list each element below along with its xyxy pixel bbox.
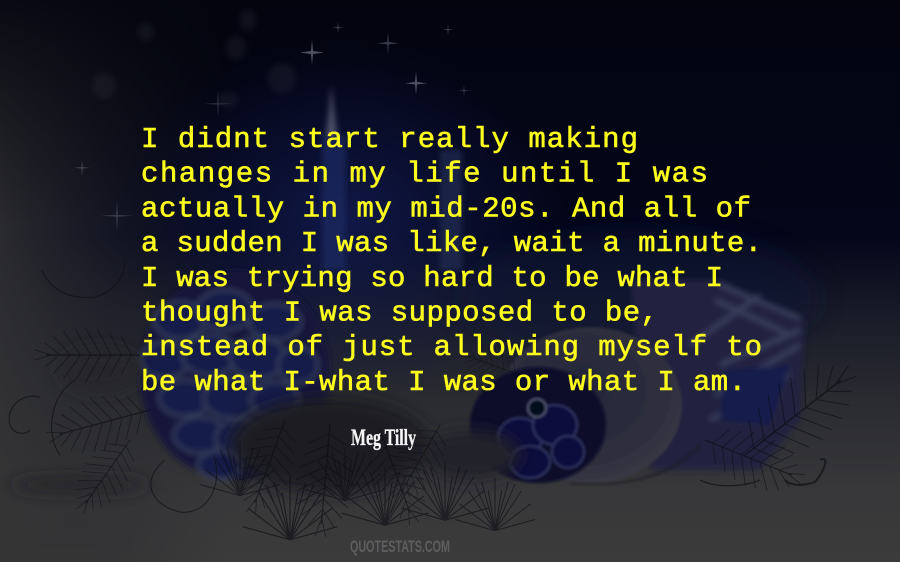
icon: sparkle stars <box>74 22 470 232</box>
watermark: QUOTESTATS.COM <box>350 537 450 556</box>
icon: candle <box>322 85 462 270</box>
quote text <box>141 123 762 399</box>
icon: dark pine cluster <box>10 348 520 493</box>
icon: blue gift box <box>630 280 805 470</box>
icon: silver ornament <box>498 327 700 484</box>
quote text: I didnt start really making <box>141 123 638 156</box>
icon: blue pine cone right <box>470 367 606 483</box>
quote text: a sudden I was like, wait a minute. <box>141 227 762 260</box>
quote text: thought I was supposed to be, <box>141 296 658 330</box>
decorative curls <box>9 260 825 512</box>
pine branches <box>35 328 874 540</box>
quote text: changes in my life until I was <box>141 158 708 191</box>
quote text: be what I-what I was or what I am. <box>141 366 746 399</box>
bokeh dots <box>92 9 296 108</box>
quote text: actually in my mid-20s. And all of <box>141 192 751 225</box>
icon: large blue pine cone <box>140 270 330 480</box>
quote text: I was trying so hard to be what I <box>141 262 723 295</box>
author: Meg Tilly <box>351 425 416 450</box>
quote text: instead of just allowing myself to <box>141 331 762 364</box>
